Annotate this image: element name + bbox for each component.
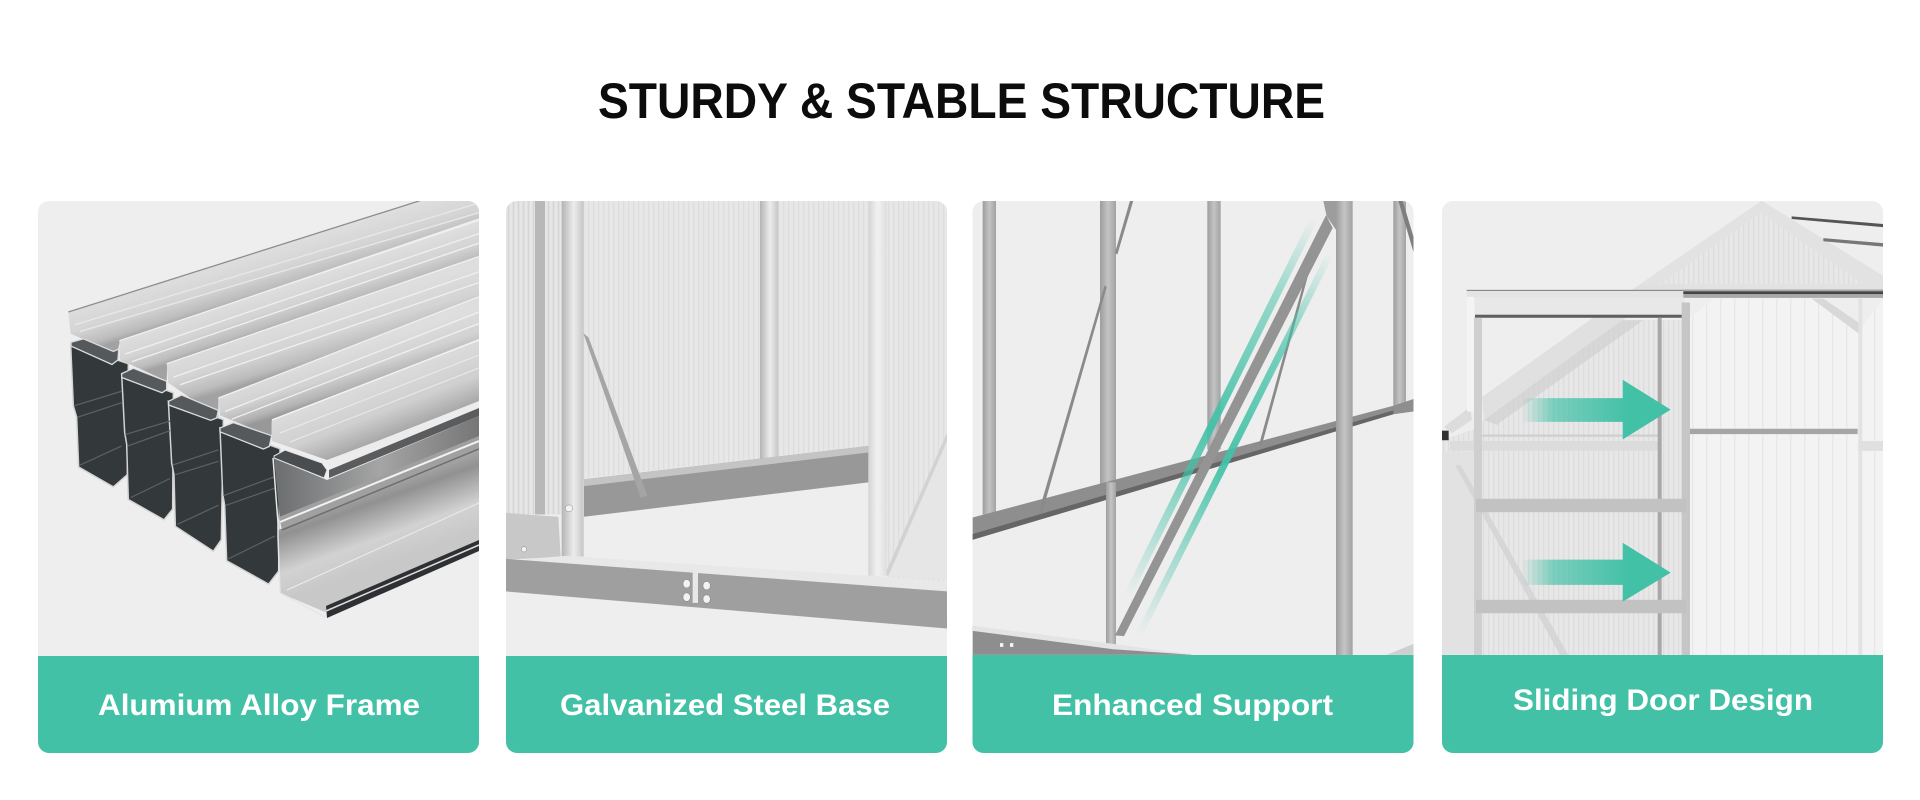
caption bar (38, 656, 479, 753)
illustration: greenhouse with sliding door (1442, 201, 1883, 656)
panel: galvanized steel base (506, 201, 947, 753)
panel: alumium alloy frame (38, 201, 479, 753)
title: STURDY & STABLE STRUCTURE (598, 73, 1325, 129)
panel: sliding door design (1442, 201, 1883, 753)
caption bar (972, 655, 1414, 753)
illustration: back aluminium profiles (68, 201, 479, 584)
arrow: top slide (1522, 380, 1671, 439)
illustration: front aluminium profile (272, 340, 479, 618)
bolts (521, 505, 710, 603)
caption text: Alumium Alloy Frame (98, 689, 420, 722)
illustration: steel base corner (506, 201, 947, 629)
illustration: support braces (973, 201, 1414, 656)
caption bar (1442, 655, 1883, 753)
teal motion lines (1123, 218, 1333, 637)
arrow: bottom slide (1522, 543, 1671, 602)
caption bar (506, 656, 947, 753)
panel: enhanced support (972, 201, 1414, 753)
caption text: Sliding Door Design (1513, 684, 1813, 717)
caption text: Enhanced Support (1052, 689, 1333, 722)
caption text: Galvanized Steel Base (560, 689, 890, 722)
